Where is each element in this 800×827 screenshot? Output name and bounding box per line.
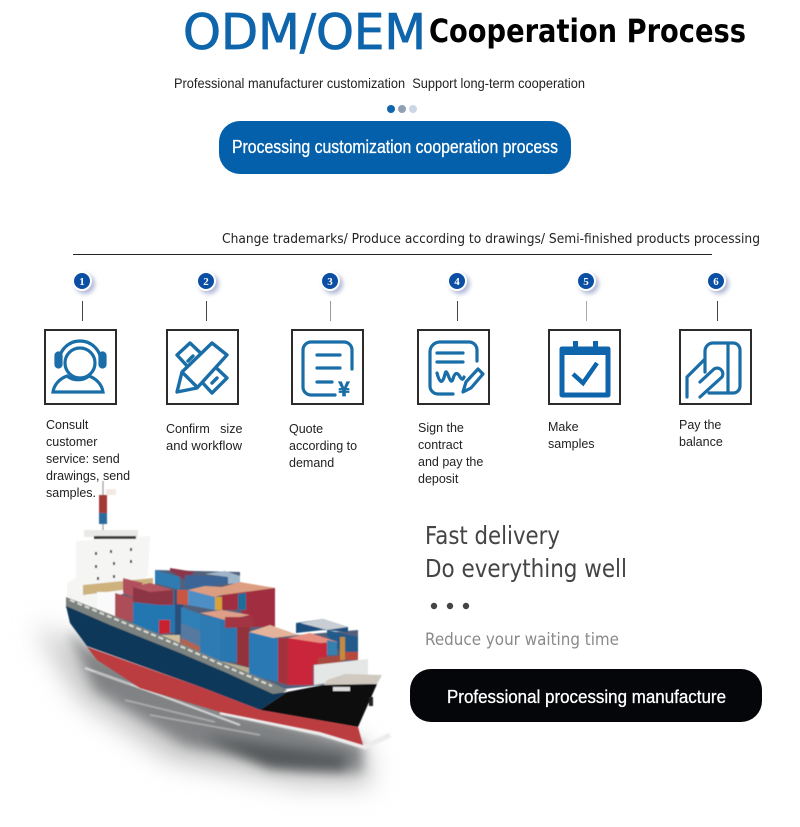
text: step 1: customer	[46, 435, 97, 449]
number badge 4: 4	[454, 276, 460, 288]
text: step 4: Sign the	[418, 421, 464, 435]
number badge 2	[196, 271, 219, 294]
banner: professional processing: Professional processing manufacture	[447, 687, 726, 707]
three dots	[431, 603, 469, 609]
text: step 5: samples	[548, 437, 595, 451]
headline: fast delivery: Do everything well	[425, 554, 627, 583]
number badge 4	[447, 271, 470, 294]
text: step 1: drawings, send	[46, 469, 130, 483]
icon: calendar check	[549, 330, 620, 404]
step 4	[418, 271, 489, 486]
deck cargo base	[115, 570, 368, 690]
step 1	[45, 271, 130, 500]
step 2	[166, 271, 243, 453]
text: step 6: Pay the	[679, 418, 721, 432]
icon: signed contract	[418, 330, 489, 404]
number badge 3: 3	[327, 276, 333, 288]
containers	[115, 568, 382, 686]
banner: professional processing	[410, 669, 762, 722]
text: step 4: deposit	[418, 472, 459, 486]
banner: processing customization	[219, 121, 571, 174]
headline: fast delivery	[425, 521, 627, 583]
banner: processing customization: Processing customization cooperation process	[232, 137, 558, 157]
text: step 6: balance	[679, 435, 723, 449]
text: step 2: Confirm size	[166, 422, 242, 436]
title: Cooperation Process	[429, 12, 746, 50]
subtitle: Professional manufacturer customization Support long-term cooperation	[174, 75, 585, 91]
text: step 2 second line: and workflow	[166, 439, 243, 453]
number badge 1	[72, 271, 95, 294]
container ship photo	[35, 481, 390, 785]
number badge 1: 1	[79, 276, 85, 288]
text: step 3: demand	[289, 456, 334, 470]
number badge 6: 6	[713, 276, 719, 288]
superstructure	[67, 530, 153, 625]
text: step 1: samples.	[46, 486, 96, 500]
title	[183, 4, 746, 61]
icon: ruler and pencil	[167, 330, 238, 404]
step 5	[548, 271, 620, 451]
text: step 1: service: send	[46, 452, 120, 466]
icon: hand holding card	[680, 330, 751, 404]
text: step 1: Consult	[46, 418, 89, 432]
title: ODM/OEM	[183, 4, 426, 61]
text: step 4: and pay the	[418, 455, 483, 469]
number badge 2: 2	[203, 276, 209, 288]
text: step 4: contract	[418, 438, 463, 452]
step 3	[289, 271, 363, 470]
number badge 5	[576, 271, 599, 294]
mast	[99, 481, 116, 530]
hull	[66, 597, 377, 745]
text: step 3: according to	[289, 439, 357, 453]
number badge 5: 5	[583, 276, 589, 288]
pagination dots	[387, 105, 417, 113]
water wake	[35, 625, 390, 785]
step 6	[679, 271, 751, 449]
text: step 5: Make	[548, 420, 579, 434]
icon: quote document	[292, 330, 363, 404]
caption: reduce waiting time: Reduce your waiting time	[425, 630, 619, 650]
icon: headset agent	[45, 330, 116, 404]
headline: fast delivery: Fast delivery	[425, 521, 560, 550]
icon: quote document: ¥	[338, 373, 350, 402]
number badge 6	[706, 271, 729, 294]
services line: Change trademarks/ Produce according to drawings/ Semi-finished products processing	[222, 231, 760, 247]
text: step 3: Quote	[289, 422, 323, 436]
number badge 3	[320, 271, 343, 294]
